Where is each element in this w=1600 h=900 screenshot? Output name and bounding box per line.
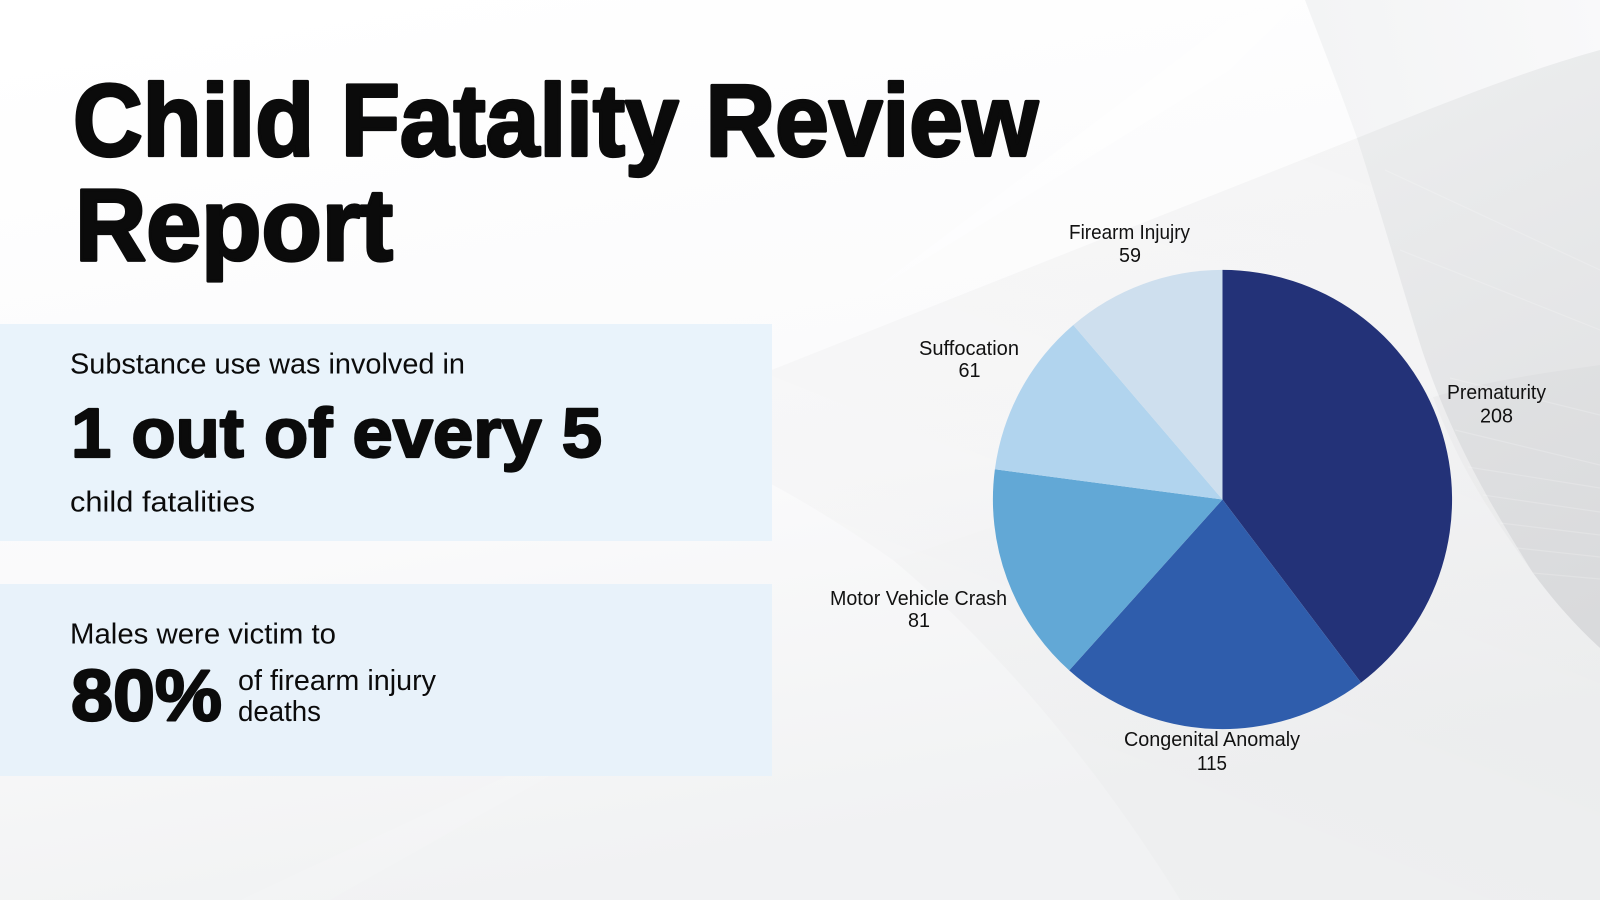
statistic: 1 out of every 5: 1 out of every 5 bbox=[71, 394, 602, 472]
label: Firearm Injury: Firearm Injujry bbox=[1069, 222, 1190, 244]
title: Report bbox=[75, 168, 393, 282]
text: of firearm injury deaths: deaths bbox=[238, 696, 321, 728]
slice: Motor Vehicle Crash 81 bbox=[993, 469, 1222, 670]
panel: substance use bbox=[0, 324, 772, 541]
title bbox=[73, 64, 1039, 282]
slice: Congenital Anomaly 115 bbox=[1069, 500, 1361, 729]
label: Firearm Injury: 59 bbox=[1119, 245, 1141, 267]
label: Suffocation: 61 bbox=[958, 360, 980, 382]
label: Motor Vehicle Crash: 81 bbox=[908, 610, 930, 632]
text: males intro: Males were victim to bbox=[70, 618, 336, 650]
label: Prematurity: Prematurity bbox=[1447, 382, 1546, 404]
label: Suffocation bbox=[919, 338, 1019, 382]
slice: Suffocation 61 bbox=[995, 325, 1222, 500]
label: Firearm Injury bbox=[1069, 222, 1190, 267]
label: Congenital Anomaly: 115 bbox=[1197, 753, 1227, 775]
slice: Prematurity 208 bbox=[1222, 270, 1452, 683]
text: of firearm injury deaths bbox=[238, 665, 436, 728]
statistic: 80%: 80% bbox=[71, 656, 222, 736]
text: child fatalities: child fatalities bbox=[70, 486, 255, 518]
title: Child Fatality Review bbox=[73, 64, 1039, 178]
label: Prematurity bbox=[1447, 382, 1546, 428]
label: Suffocation: Suffocation bbox=[919, 338, 1019, 360]
label: Congenital Anomaly: Congenital Anomaly bbox=[1124, 729, 1300, 751]
label: Prematurity: 208 bbox=[1480, 406, 1513, 428]
panel: males firearm deaths bbox=[0, 584, 772, 776]
text: of firearm injury deaths: of firearm injury bbox=[238, 665, 436, 697]
label: Motor Vehicle Crash bbox=[830, 588, 1007, 632]
slice: Firearm Injury 59 bbox=[1073, 270, 1222, 500]
text: substance intro: Substance use was involved in bbox=[70, 348, 465, 380]
label: Congenital Anomaly bbox=[1124, 729, 1300, 775]
label: Motor Vehicle Crash: Motor Vehicle Crash bbox=[830, 588, 1007, 610]
pie chart bbox=[993, 270, 1452, 729]
